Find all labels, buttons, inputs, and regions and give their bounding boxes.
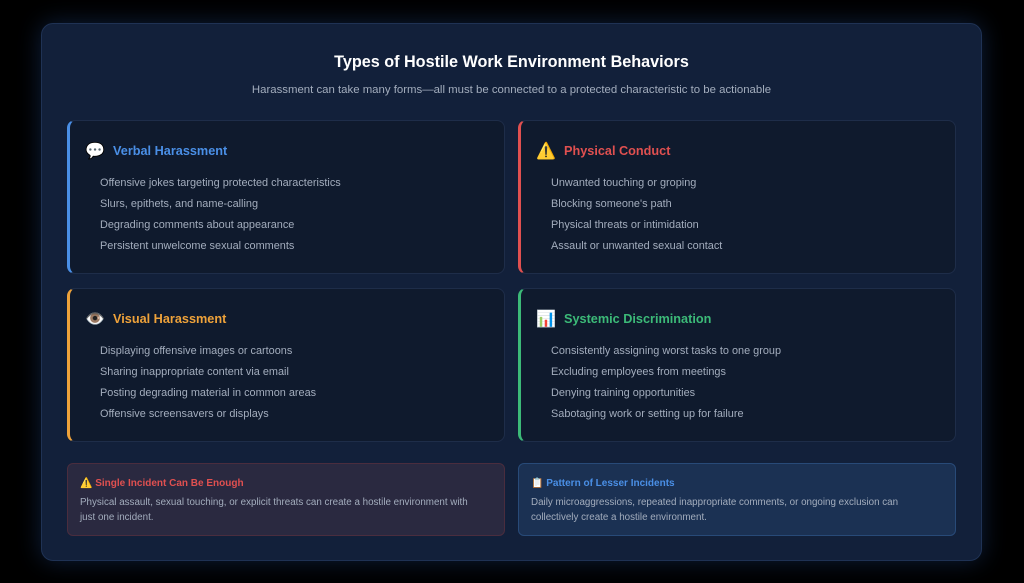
title: Types of Hostile Work Environment Behaviors: [334, 53, 689, 71]
list: physical: Physical threats or intimidation: [551, 219, 699, 231]
list: physical: Unwanted touching or groping: [551, 177, 696, 189]
callout: single incident: [67, 463, 505, 536]
list: visual: Posting degrading material in common areas: [100, 387, 316, 399]
subtitle: Harassment can take many forms—all must be connected to a protected characteristic to be actionable: [252, 84, 771, 96]
heading: systemic: 📊: [536, 311, 556, 328]
heading: physical: Physical Conduct: [564, 144, 670, 158]
heading: systemic: [536, 310, 711, 328]
heading: physical: [536, 142, 670, 160]
list: verbal: Degrading comments about appearance: [100, 219, 294, 231]
heading: visual: Visual Harassment: [113, 312, 226, 326]
callout heading: 📋 Pattern of Lesser Incidents: [531, 478, 675, 489]
list: systemic: [551, 345, 781, 420]
list: systemic: Denying training opportunities: [551, 387, 695, 399]
list: physical: Assault or unwanted sexual contact: [551, 240, 722, 252]
list: systemic: Consistently assigning worst tasks to one group: [551, 345, 781, 357]
list: visual: Displaying offensive images or cartoons: [100, 345, 292, 357]
panel: verbal harassment: [67, 120, 505, 274]
heading: physical: ⚠️: [536, 143, 556, 160]
heading: verbal: [85, 142, 228, 160]
heading: visual: 👁️: [85, 311, 105, 328]
heading: visual: [85, 311, 226, 328]
callout text: Daily microaggressions, repeated inappropriate comments, or ongoing exclusion can collectively create a hostile environment.: [531, 497, 898, 523]
panel: physical conduct: [518, 120, 956, 274]
callout heading: ⚠️ Single Incident Can Be Enough: [80, 478, 244, 489]
list: visual: [100, 345, 316, 420]
list: visual: Sharing inappropriate content via email: [100, 366, 289, 378]
heading: systemic: Systemic Discrimination: [564, 312, 711, 326]
list: verbal: Offensive jokes targeting protected characteristics: [100, 177, 341, 189]
list: verbal: Persistent unwelcome sexual comments: [100, 240, 294, 252]
list: systemic: Sabotaging work or setting up for failure: [551, 408, 744, 420]
list: visual: Offensive screensavers or displays: [100, 408, 269, 420]
list: verbal: [100, 177, 341, 252]
heading: verbal: 💬: [85, 143, 105, 160]
callout: pattern: [518, 463, 956, 536]
panel: systemic discrimination: [518, 288, 956, 442]
panel: visual harassment: [67, 288, 505, 442]
list: physical: [551, 177, 722, 252]
list: physical: Blocking someone's path: [551, 198, 672, 210]
list: systemic: Excluding employees from meetings: [551, 366, 726, 378]
heading: verbal: Verbal Harassment: [113, 144, 227, 158]
list: verbal: Slurs, epithets, and name-calling: [100, 198, 258, 210]
callout text: Physical assault, sexual touching, or explicit threats can create a hostile environment with just one incident.: [80, 497, 468, 523]
